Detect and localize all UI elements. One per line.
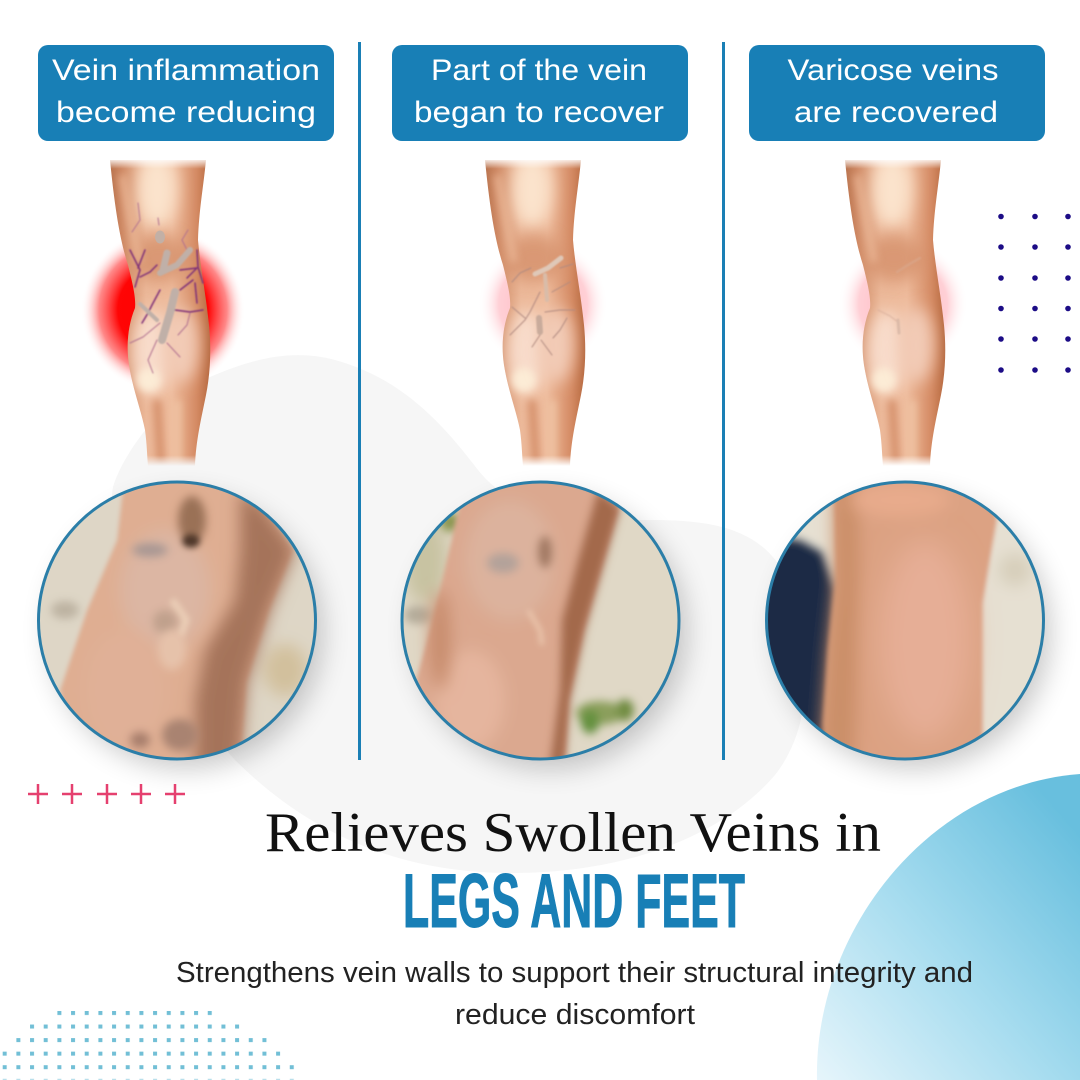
description text: reduce discomfort: [455, 999, 695, 1031]
background blob: [112, 355, 805, 873]
heading: stage 2: Part of the vein: [431, 54, 647, 87]
description text: [176, 957, 973, 1031]
leg illustration: inflamed veins: [81, 152, 245, 470]
panel: stage 2: [385, 45, 705, 780]
panel: stage 3: [749, 45, 1070, 780]
heading: stage 2: [392, 45, 688, 141]
heading: stage 3: are recovered: [794, 96, 998, 129]
plus signs decoration: [28, 784, 185, 804]
heading: stage 3: Varicose veins: [788, 54, 998, 87]
description text: Strengthens vein walls to support their structural integrity and: [176, 957, 973, 989]
leg illustration: veins recovered: [838, 152, 968, 470]
leg illustration: veins recovering: [478, 152, 608, 470]
photo: leg with swollen veins: [20, 470, 340, 780]
blue quarter circle: [817, 774, 1080, 1080]
column dividers: [358, 42, 725, 760]
title line 1: Relieves Swollen Veins in: [265, 802, 881, 864]
heading: stage 2: began to recover: [414, 96, 664, 129]
heading: stage 1: [38, 45, 334, 141]
heading: stage 3: [749, 45, 1045, 141]
photo: leg partially recovered: [385, 470, 705, 780]
title line 2: LEGS AND FEET: [403, 859, 745, 944]
photo: recovered leg: [750, 470, 1070, 780]
heading: stage 1: become reducing: [56, 96, 316, 129]
panel: stage 1: [20, 45, 340, 780]
navy dot grid: [998, 214, 1071, 373]
heading: stage 1: Vein inflammation: [52, 54, 320, 87]
teal dot pattern: [2, 1010, 295, 1080]
